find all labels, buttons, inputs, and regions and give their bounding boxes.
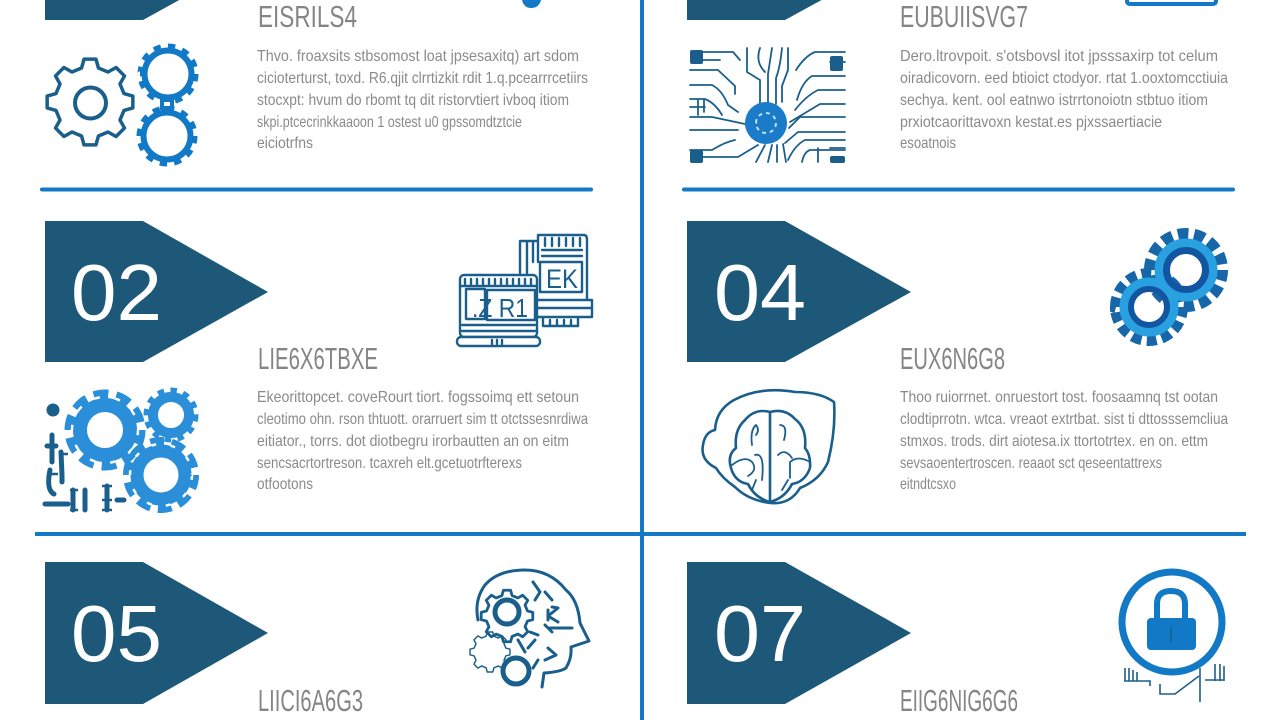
arrow badge: 07: 07 <box>714 589 806 678</box>
arrow badge: 02 <box>45 221 268 362</box>
icon: two interlocked gears <box>1116 234 1222 340</box>
arrow badge: 04 <box>687 221 911 362</box>
icon: circuit brain <box>690 48 845 163</box>
panel: 05 <box>45 562 589 718</box>
heading: EUBUIISVG7 <box>900 0 1028 34</box>
arrow badge: 04: 04 <box>714 248 806 337</box>
arrow badge: 07 <box>687 562 911 704</box>
body text: eiciotrfns <box>257 135 313 152</box>
icon text: laptop screen: .Z R1 <box>472 293 528 323</box>
body text <box>257 389 588 493</box>
body text: eitndtcsxo <box>900 476 956 493</box>
arrow badge: top right <box>687 0 911 20</box>
body text: clodtiprrotn. wtca. vreaot extrtbat. sist ti dttosssemcliua <box>900 411 1228 428</box>
heading: EUX6N6G8 <box>900 341 1005 376</box>
body text: cicioterturst, toxd. R6.qjit clrrtizkit rdit 1.q.pcearrrcetiirs <box>257 70 588 87</box>
body text: eitiator., torrs. dot diotbegru irorbautten an on eitm <box>257 433 569 450</box>
body text: oiradicovorn. eed btioict ctodyor. rtat 1.ooxtomcctiuia <box>900 70 1228 87</box>
body text: esoatnois <box>900 135 956 152</box>
body text: stocxpt: hvum do rbomt tq dit ristorvtiert ivboq itiom <box>257 92 569 109</box>
arrow badge: top left <box>45 0 268 20</box>
body text: sevsaoentertroscen. reaaot sct qeseentattrexs <box>900 455 1162 472</box>
icon: brain in head outline <box>703 390 834 503</box>
icon: head with gears <box>470 570 589 687</box>
heading: EIIG6NIG6G6 <box>900 683 1018 718</box>
icon: blue drop <box>522 0 541 8</box>
panel: 07 <box>687 562 1224 718</box>
icon: padlock in circle <box>1122 572 1224 702</box>
arrow badge: 05: 05 <box>71 589 162 678</box>
icon: three blue gears with glyph bits <box>45 390 196 510</box>
panel: 04 <box>687 221 1228 503</box>
body text <box>900 389 1228 493</box>
body text: sencsacrtortreson. tcaxreh elt.gcetuotrfterexs <box>257 455 522 472</box>
heading: LIE6X6TBXE <box>258 341 378 376</box>
icon: laptop and device <box>457 235 592 346</box>
heading: EISRILS4 <box>258 0 357 34</box>
body text: cleotimo ohn. rson thtuott. orarruert sim tt otctssesnrdiwa <box>257 411 588 428</box>
body text: Dero.ltrovpoit. s'otsbovsl itot jpsssaxirp tot celum <box>900 48 1218 65</box>
icon: gears outline and blue <box>47 46 196 164</box>
body text: otfootons <box>257 476 313 493</box>
body text: sechya. kent. ool eatnwo istrrtonoiotn stbtuo itiom <box>900 92 1208 109</box>
panel: 02 <box>45 221 592 510</box>
panel: top right (clipped) <box>687 0 1228 163</box>
body text: Thoo ruiorrnet. onruestort tost. foosaamnq tst ootan <box>900 389 1218 406</box>
body text: Thvo. froaxsits stbsomost loat jpsesaxitq) art sdom <box>257 48 579 65</box>
arrow badge: 05 <box>45 562 268 704</box>
arrow badge: 02: 02 <box>71 248 162 337</box>
body text: stmxos. trods. dirt aiotesa.ix ttortotrtex. en on. ettm <box>900 433 1208 450</box>
body text: prxiotcaorittavoxn kestat.es pjxssaertiacie <box>900 114 1162 131</box>
heading: LIICI6A6G3 <box>258 683 363 718</box>
panel: top left (clipped) <box>45 0 588 164</box>
body text: skpi.ptcecrinkkaaoon 1 ostest u0 gpssomdtztcie <box>257 114 522 131</box>
icon: rounded box bottom <box>1127 0 1216 4</box>
icon text: device screen: EK <box>546 264 578 294</box>
body text <box>257 48 588 152</box>
body text <box>900 48 1228 152</box>
body text: Ekeorittopcet. coveRourt tiort. fogssoimq ett setoun <box>257 389 579 406</box>
